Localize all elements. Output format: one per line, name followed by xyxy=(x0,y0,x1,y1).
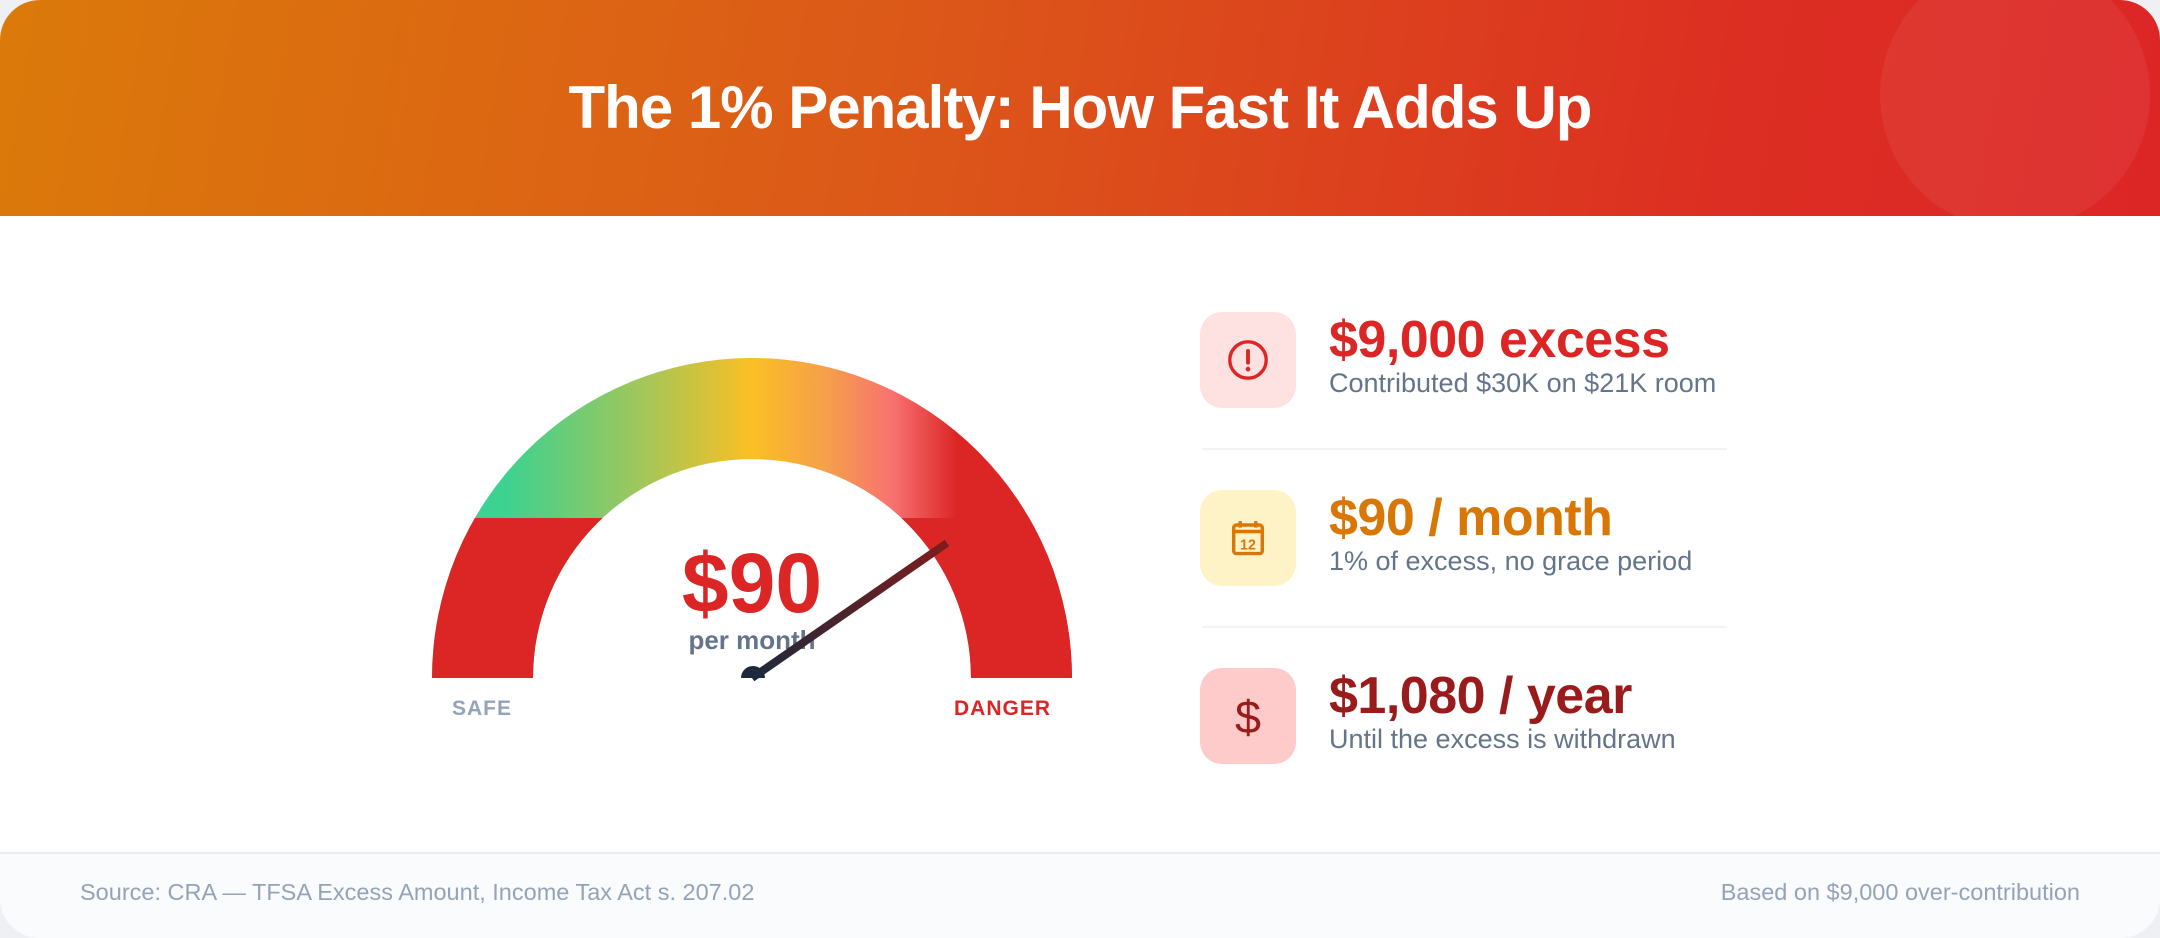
title: The 1% Penalty: How Fast It Adds Up xyxy=(569,74,1591,141)
gauge value: per month xyxy=(688,625,816,655)
icon: calendar xyxy=(1200,490,1296,586)
item: yearly: $1,080 / year xyxy=(1329,667,1632,725)
icon: dollar: $ xyxy=(1235,691,1261,742)
icon: alert xyxy=(1200,312,1296,408)
footer source: Source: CRA — TFSA Excess Amount, Income Tax Act s. 207.02 xyxy=(80,879,754,905)
item: monthly: 1% of excess, no grace period xyxy=(1329,546,1692,576)
item: excess: $9,000 excess xyxy=(1329,311,1670,369)
gauge value: $90 xyxy=(682,536,822,630)
icon: calendar: 12 xyxy=(1240,538,1256,554)
header banner xyxy=(0,0,2160,216)
item: excess: Contributed $30K on $21K room xyxy=(1329,368,1716,398)
item: monthly: $90 / month xyxy=(1329,489,1612,547)
label: safe: SAFE xyxy=(452,697,512,720)
item: excess xyxy=(1200,311,1716,408)
footer note: Based on $9,000 over-contribution xyxy=(1721,879,2080,905)
needle xyxy=(741,543,947,690)
footer xyxy=(0,852,2160,938)
icon: dollar xyxy=(1200,668,1296,764)
item: yearly xyxy=(1200,667,1676,764)
gauge chart xyxy=(432,358,1072,720)
label: danger: DANGER xyxy=(954,697,1051,720)
item: monthly xyxy=(1200,489,1692,586)
item: yearly: Until the excess is withdrawn xyxy=(1329,724,1676,754)
